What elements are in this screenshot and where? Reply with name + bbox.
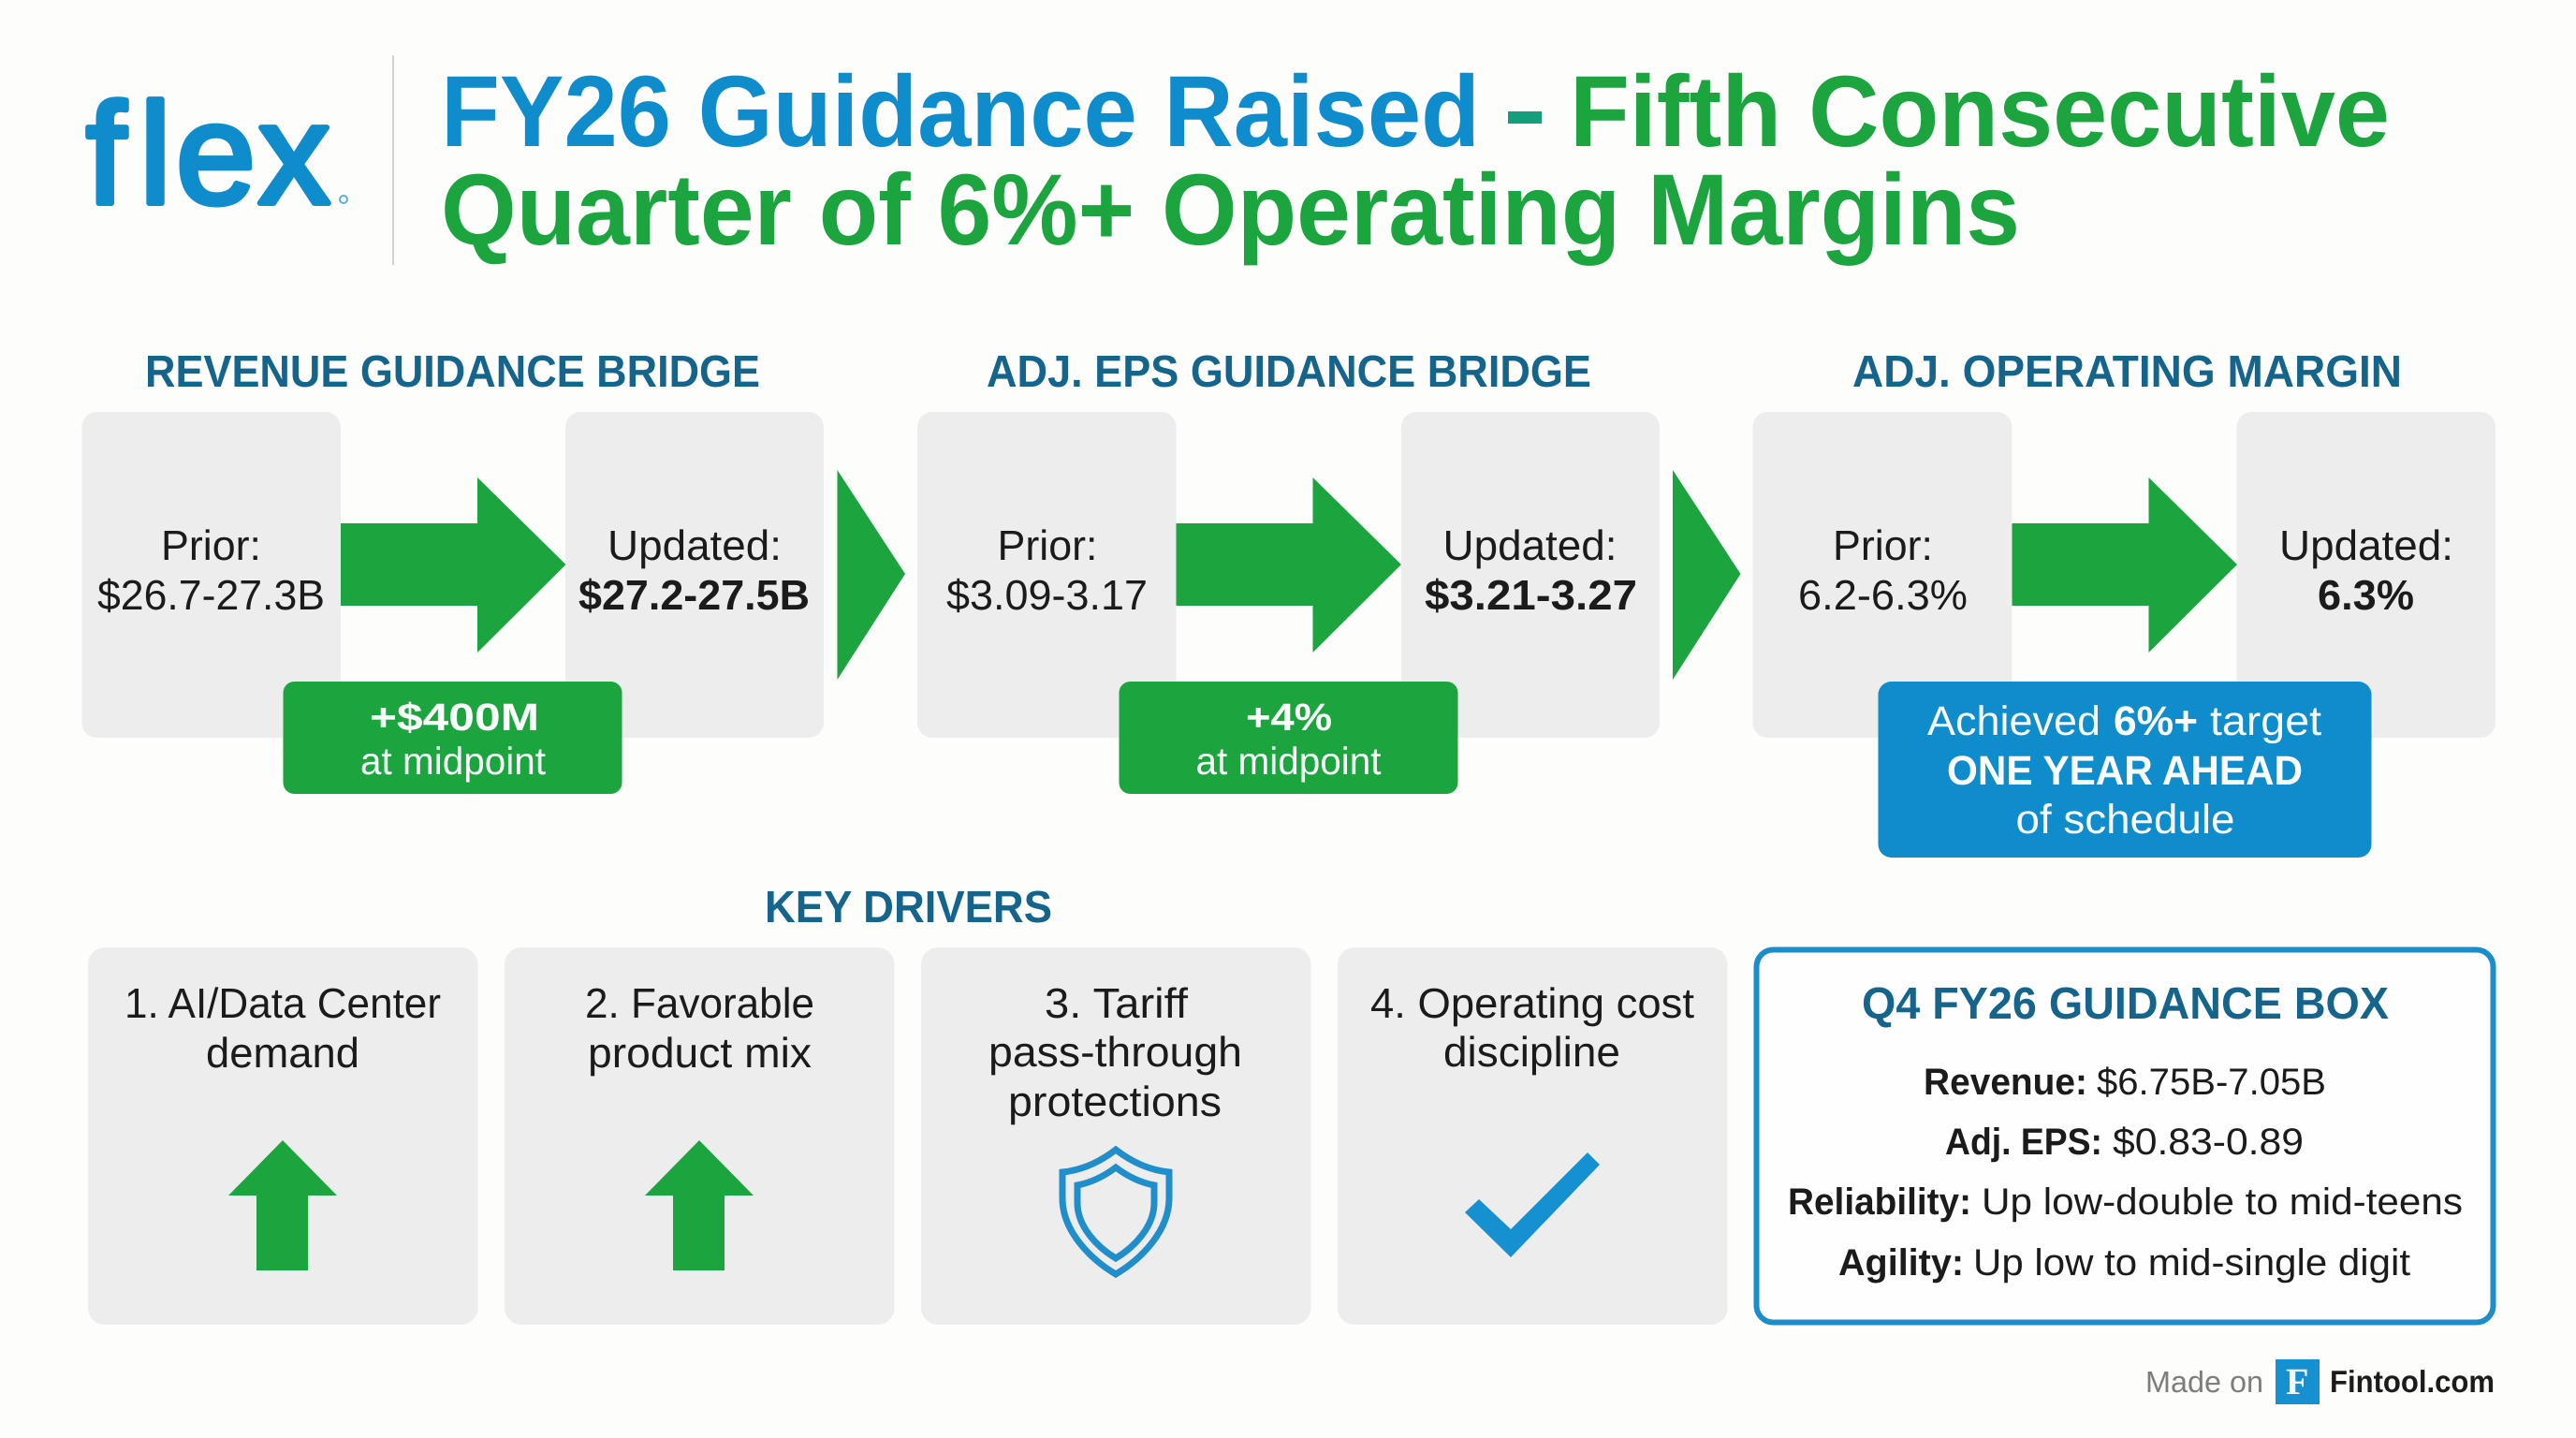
card: driver 1 AI/Data Center demand: demand — [206, 1029, 359, 1077]
card: prior margin — [1752, 412, 2012, 738]
heading: revenue guidance bridge: REVENUE GUIDANCE BRIDGE — [145, 347, 760, 397]
line: reliability: Up low-double to mid-teens — [1982, 1181, 2463, 1223]
line: adj. EPS — [1945, 1122, 2304, 1163]
card: updated margin — [2237, 412, 2496, 738]
arrow: prior to updated — [341, 477, 565, 653]
badge: achieved target one year ahead: 6%+ — [2114, 698, 2198, 744]
card: prior margin: Prior: — [1833, 521, 1933, 569]
badge: +4% at midpoint: at midpoint — [1196, 740, 1382, 783]
card: updated revenue — [565, 412, 824, 738]
line: reliability: Reliability: — [1788, 1181, 1971, 1223]
icon: Fintool logo: F — [2286, 1360, 2308, 1402]
badge: achieved target one year ahead: of schedule — [2016, 797, 2235, 843]
heading: adj. EPS guidance bridge: ADJ. EPS GUIDANCE BRIDGE — [987, 347, 1591, 397]
arrow: prior to updated — [1176, 477, 1401, 653]
card: updated margin: 6.3% — [2318, 571, 2414, 619]
line: revenue: Revenue: — [1924, 1062, 2087, 1103]
card: updated margin: Updated: — [2279, 521, 2453, 569]
line: revenue: $6.75B-7.05B — [2097, 1062, 2326, 1103]
panel: adj. EPS guidance bridge — [917, 347, 1660, 794]
heading: Q4 FY26 guidance box: Q4 FY26 GUIDANCE BOX — [1862, 979, 2389, 1029]
icon: Fintool logo — [2276, 1359, 2320, 1404]
title: FY26 Guidance Raised — [441, 54, 1480, 168]
card: driver 2 favorable product mix — [505, 947, 895, 1325]
badge: +$400M at midpoint: +$400M — [370, 696, 539, 739]
title — [441, 54, 2390, 266]
line: adj. EPS: Adj. EPS: — [1945, 1122, 2102, 1163]
line: revenue — [1924, 1062, 2326, 1103]
badge: +4% at midpoint — [1120, 682, 1458, 794]
line: agility: Up low to mid-single digit — [1973, 1242, 2410, 1284]
card: driver 3 tariff pass-through protections: 3. Tariff — [1045, 979, 1189, 1027]
card: updated EPS — [1401, 412, 1660, 738]
card: driver 3 tariff pass-through protections — [921, 947, 1310, 1325]
card: prior EPS: $3.09-3.17 — [946, 571, 1148, 619]
footer: made on Fintool.com: Fintool.com — [2330, 1364, 2495, 1399]
line: reliability — [1788, 1181, 2463, 1223]
card: prior margin: 6.2-6.3% — [1798, 571, 1968, 619]
badge: +4% at midpoint: +4% — [1246, 696, 1332, 739]
line: adj. EPS: $0.83-0.89 — [2113, 1122, 2304, 1163]
card: driver 3 tariff pass-through protections: pass-through — [988, 1028, 1242, 1076]
card: driver 4 operating cost discipline: discipline — [1443, 1028, 1620, 1076]
title: Fifth Consecutive — [1570, 54, 2390, 168]
card: prior revenue: Prior: — [161, 521, 261, 569]
panel: revenue guidance bridge — [82, 347, 824, 794]
footer: made on Fintool.com: Made on — [2145, 1365, 2263, 1399]
card: prior revenue: $26.7-27.3B — [97, 571, 325, 619]
badge: achieved target one year ahead: target — [2210, 698, 2321, 744]
panel: adj. operating margin — [1752, 347, 2496, 858]
icon: shield — [1062, 1150, 1169, 1274]
card: driver 1 AI/Data Center demand — [88, 947, 477, 1325]
title: Quarter of 6%+ Operating Margins — [441, 153, 2020, 266]
card: updated revenue: Updated: — [607, 521, 782, 569]
badge: achieved target one year ahead: ONE YEAR AHEAD — [1947, 748, 2303, 794]
icon: up arrow — [228, 1140, 337, 1270]
badge: achieved target one year ahead: Achieved — [1927, 698, 2100, 744]
card: driver 3 tariff pass-through protections: protections — [1008, 1078, 1222, 1125]
panel: Q4 FY26 guidance box — [1756, 949, 2494, 1322]
card: driver 2 favorable product mix: 2. Favorable — [585, 979, 814, 1027]
card: prior EPS — [917, 412, 1176, 738]
badge: achieved target one year ahead — [1878, 682, 2372, 858]
badge: +$400M at midpoint: at midpoint — [360, 740, 547, 783]
icon: up arrow — [645, 1140, 754, 1270]
heading: adj. operating margin: ADJ. OPERATING MARGIN — [1852, 347, 2402, 397]
icon: check mark — [1465, 1152, 1600, 1257]
line: agility: Agility: — [1838, 1242, 1964, 1284]
footer: made on Fintool.com — [2145, 1359, 2495, 1404]
card: driver 4 operating cost discipline — [1338, 947, 1728, 1325]
card: prior revenue — [82, 412, 341, 738]
arrow: prior to updated — [2012, 477, 2237, 653]
card: driver 1 AI/Data Center demand: 1. AI/Data Center — [124, 979, 441, 1027]
logo: flex: flex — [86, 74, 329, 234]
card: driver 4 operating cost discipline: 4. Operating cost — [1370, 979, 1695, 1027]
card: updated EPS: $3.21-3.27 — [1425, 571, 1637, 619]
card: driver 2 favorable product mix: product mix — [588, 1029, 812, 1077]
card: updated revenue: $27.2-27.5B — [578, 571, 810, 619]
heading: key drivers: KEY DRIVERS — [765, 883, 1052, 932]
card: updated EPS: Updated: — [1443, 521, 1617, 569]
arrow: revenue to EPS — [837, 470, 905, 680]
badge: +$400M at midpoint — [283, 682, 622, 794]
arrow: EPS to margin — [1673, 470, 1741, 680]
card: prior EPS: Prior: — [998, 521, 1097, 569]
